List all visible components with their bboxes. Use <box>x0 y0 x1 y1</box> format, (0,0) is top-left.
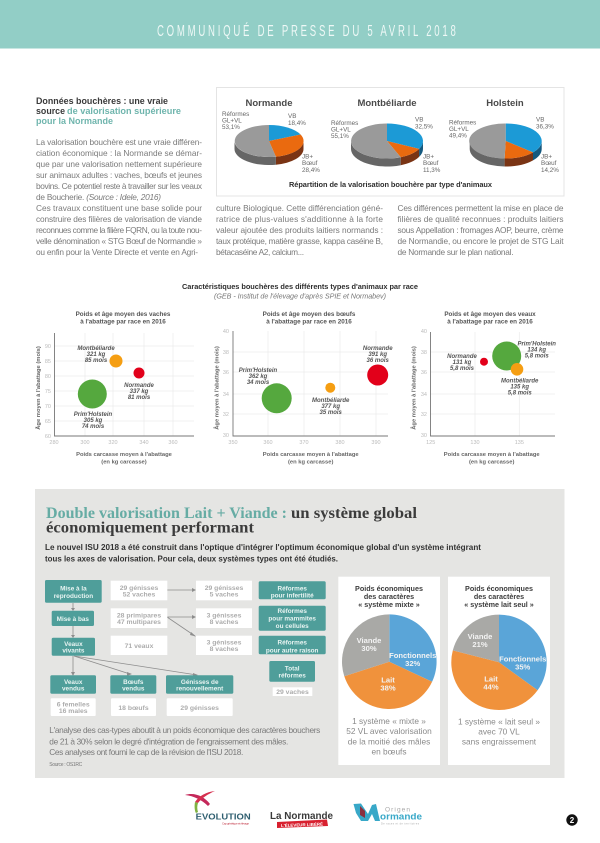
pie panel: système lait seul: 44% <box>483 682 499 692</box>
pie panel: système lait seul: des caractères <box>474 592 524 601</box>
pie panel: système mixte: Viande <box>357 636 381 645</box>
pie: Holstein: JB+ <box>541 154 552 160</box>
value box: 29 vaches: 29 vaches <box>276 689 309 696</box>
pie: Holstein <box>449 98 559 174</box>
chart: bœufs: 362 kg <box>249 374 268 380</box>
chart: vaches: 320 <box>108 440 118 446</box>
chart: veaux: 134 kg <box>527 348 546 354</box>
flow box: réformes pour infertilité: pour infertilité <box>271 592 314 600</box>
flow box: réformes pour mammites: ou cellules <box>276 623 309 630</box>
text block: column 3: de Normandie, ou encore le projet de STG Lait <box>398 236 564 246</box>
flow box: réformes pour mammites <box>259 606 326 631</box>
text block: column 3: Ces différences permettent la mise en place de <box>398 203 564 213</box>
logo: La Normande <box>270 810 333 828</box>
chart: vaches: 65 <box>45 419 51 425</box>
heading: caractéristiques bouchères: (GEB - Institut de l'élevage d'après SPIE et Normabev) <box>214 292 386 300</box>
pie panel: système lait seul: sans engraissement <box>462 736 537 746</box>
chart: bœufs: 380 <box>335 440 345 446</box>
value box: 71 veaux: 71 veaux <box>125 643 154 650</box>
chart: bœufs: 34 <box>223 392 229 398</box>
heading: données bouchères: Données bouchères : une vraie <box>36 96 168 106</box>
chart: bœufs: 30 <box>223 433 229 439</box>
flow box: mise à la reproduction: Mise à la <box>60 586 87 592</box>
text block: column 1 <box>36 137 203 257</box>
chart: bœufs: Poids carcasse moyen à l'abattage <box>263 452 359 458</box>
chart: veaux: 125 <box>426 440 435 446</box>
chart: bœufs: 360 <box>263 440 273 446</box>
pie: Holstein: VB <box>536 116 544 124</box>
flow box: veaux vivants <box>52 638 95 656</box>
pie panel: système mixte: Fonctionnels <box>389 651 436 660</box>
pie panel: système lait seul: avec 70 VL <box>478 726 520 736</box>
heading: données bouchères: source <box>36 106 65 116</box>
value box: 3 génisses 8 vaches: 8 vaches <box>210 619 239 626</box>
chart: bœufs: Poids et âge moyen des bœufs <box>263 311 356 318</box>
chart: vaches <box>35 311 194 466</box>
panel heading: Double valorisation Lait + Viande : <box>46 505 287 522</box>
pie: Normande: Normande <box>246 98 292 109</box>
chart: vaches: 70 <box>45 404 51 410</box>
chart: vaches: 85 <box>45 359 51 365</box>
chart: veaux: 135 <box>515 440 524 446</box>
flow box: veaux vendus: Veaux <box>64 679 83 686</box>
pie: Holstein: 49,4% <box>449 132 467 140</box>
flow box: veaux vivants: Veaux <box>64 641 83 648</box>
panel: répartition de la valorisation bouchère <box>216 88 564 196</box>
panel heading: un système global <box>291 505 418 522</box>
flow box: veaux vendus: vendus <box>62 686 85 692</box>
chart: veaux: 130 <box>470 440 480 446</box>
flow box: total réformes <box>269 661 315 682</box>
pie panel: système lait seul: 1 système « lait seul » <box>458 716 540 726</box>
page number: 2 <box>570 816 575 825</box>
pie: Holstein: 14,2% <box>541 167 559 174</box>
chart: vaches: 81 mois <box>128 395 151 401</box>
value box: 29 génisses 52 vaches <box>111 581 167 600</box>
value box: 6 femelles 16 males: 6 femelles <box>57 702 90 708</box>
pie: Holstein: GL+VL <box>449 126 469 133</box>
flow box: veaux vivants: vivants <box>62 648 85 654</box>
text block: column 1: bovins. Ce potentiel reste à travailler sur les veaux <box>36 181 203 191</box>
chart: bœufs: 377 kg <box>321 404 340 410</box>
chart: bœufs: 36 mois <box>367 358 390 364</box>
flow box: total réformes: réformes <box>279 672 306 680</box>
flow box: réformes pour infertilité: Réformes <box>277 586 307 592</box>
chart: bœufs: 38 <box>223 350 229 356</box>
text block: column 1: de Boucherie. (Source : Idele, 2016) <box>36 192 161 202</box>
chart: veaux: 40 <box>421 329 427 335</box>
pie: Montbéliarde: GL+VL <box>331 126 351 134</box>
pie panel: système lait seul: Viande <box>468 632 492 641</box>
value box: 6 femelles 16 males <box>51 698 96 716</box>
chart: veaux: 131 kg <box>453 360 472 366</box>
pie: Montbéliarde <box>331 98 441 174</box>
pie: Holstein: Bœuf <box>541 160 557 167</box>
flow arrows <box>71 588 198 677</box>
pie panel: système lait seul <box>448 577 550 765</box>
text block: column 1: reconnues comme la filière FQRN, ou la toute nou- <box>36 225 202 235</box>
page number <box>566 814 578 826</box>
text block: column 3: de Normande sur le plan national. <box>398 247 514 257</box>
chart: veaux: 5,8 mois <box>450 366 475 372</box>
pie panel caption: Répartition de la valorisation bouchère par type d'animaux <box>289 180 493 189</box>
panel heading: économiquement performant <box>46 520 255 536</box>
pie: Holstein: Holstein <box>486 98 524 109</box>
pie: Normande: 53,1% <box>222 124 240 131</box>
text block: column 2: valeur ajoutée des produits laitiers normands : <box>216 225 383 235</box>
chart: veaux: Prim'Holstein <box>517 342 556 348</box>
flow box: mise à bas <box>52 611 94 626</box>
chart: bœufs: 370 <box>299 440 309 446</box>
value box: 3 génisses 8 vaches, autre raison: 3 génisses <box>207 640 242 646</box>
header banner <box>0 0 600 48</box>
value box: 3 génisses 8 vaches: 3 génisses <box>207 612 242 620</box>
text block: column 1: ciation économique : la Normande se démar- <box>36 148 202 158</box>
chart: bœufs <box>214 311 393 466</box>
text block: column 1: construire des filières de valorisation de viande <box>36 214 202 224</box>
panel: double valorisation <box>35 489 564 778</box>
value box: 3 génisses 8 vaches, autre raison <box>196 636 252 655</box>
logo: Origen Normande: De races et de territoires <box>381 822 420 826</box>
text block: column 3: sous Appellation : fromages AOP, beurre, crème <box>398 225 564 235</box>
chart: vaches: (en kg carcasse) <box>101 460 147 466</box>
panel conclusion text <box>49 725 320 768</box>
text block: column 2 <box>216 203 383 257</box>
value box: 6 femelles 16 males: 16 males <box>59 708 88 715</box>
flow box: bœufs vendus: Bœufs <box>123 679 144 686</box>
logo: Origen Normande <box>354 804 422 826</box>
heading: caractéristiques bouchères: Caractéristiques bouchères des différents types d'animaux par race <box>182 282 418 291</box>
flow box: génisses de renouvellement: renouvellement <box>176 686 224 692</box>
flow box: réformes pour mammites: Réformes <box>277 608 307 615</box>
chart: veaux: Montbéliarde <box>501 378 539 384</box>
text block: column 1: Ces travaux constituent une base solide pour <box>36 203 202 213</box>
pie panel: système mixte: 1 système « mixte » <box>352 716 426 726</box>
flow box: réformes pour autre raison <box>259 636 326 654</box>
chart: vaches: 280 <box>49 440 59 446</box>
panel conclusion text: de 21 à 30% selon le degré d'intégration de l'engraissement des mâles. <box>49 736 288 746</box>
chart: vaches: Normande <box>124 383 154 389</box>
chart: vaches: 337 kg <box>130 389 149 395</box>
pie: Montbéliarde: 55,1% <box>331 133 349 140</box>
chart: bœufs: 34 mois <box>247 380 270 386</box>
pie: Normande: Réformes <box>222 111 249 118</box>
chart: vaches: Poids et âge moyen des vaches <box>76 311 171 318</box>
chart: vaches: 340 <box>139 440 149 446</box>
chart: bœufs: 35 mois <box>320 410 343 416</box>
heading: données bouchères: pour la Normande <box>36 116 113 126</box>
value box: 28 primipares 47 multipares: 47 multipares <box>117 619 161 626</box>
chart: veaux: Poids carcasse moyen à l'abattage <box>444 452 540 458</box>
chart: bœufs: Âge moyen à l'abattage (mois) <box>214 346 220 430</box>
flow box: réformes pour autre raison: pour autre raison <box>266 648 319 654</box>
flow box: réformes pour infertilité <box>259 581 326 600</box>
flow box: réformes pour autre raison: Réformes <box>277 640 307 646</box>
panel intro text: Le nouvel ISU 2018 a été construit dans l'optique d'intégrer l'optimum économique global d'un système intégrant <box>45 543 481 552</box>
pie panel: système lait seul: Lait <box>484 674 498 684</box>
flow box: veaux vendus <box>50 675 96 694</box>
panel heading <box>46 505 418 536</box>
chart: veaux: 135 kg <box>510 384 529 390</box>
text block: column 1: que par une valorisation nettement supérieure <box>36 159 202 169</box>
pie: Montbéliarde: Réformes <box>331 120 358 127</box>
chart: veaux: Âge moyen à l'abattage (mois) <box>410 346 418 430</box>
text block: column 3: filières de qualité reconnues : produits laitiers <box>398 214 564 224</box>
text block: column 2: taux protéique, matière grasse, kappa caséine B, <box>216 236 383 246</box>
pie panel: système lait seul: 21% <box>472 640 488 649</box>
pie panel: système mixte: des caractères <box>364 592 414 601</box>
pie panel: système lait seul: Poids économiques <box>465 584 533 593</box>
value box: 29 génisses 5 vaches <box>196 581 252 600</box>
value box: 3 génisses 8 vaches <box>196 608 252 628</box>
heading: caractéristiques bouchères <box>182 282 418 300</box>
logo: Evolution: Cap génétique et élevage <box>222 822 249 826</box>
text block: column 1: velle dénomination « STG Bœuf de Normandie » <box>36 236 202 246</box>
chart: vaches: 90 <box>45 344 51 350</box>
heading: données bouchères: de valorisation supérieure <box>67 106 181 116</box>
chart: bœufs: Montbéliarde <box>312 398 350 404</box>
pie: Holstein: Réformes <box>449 120 476 126</box>
chart: vaches: 305 kg <box>84 418 103 424</box>
logo: La Normande: L'ÉLEVEUR LIBÉRÉ <box>281 822 323 828</box>
pie: Normande: 18,4% <box>288 120 306 127</box>
heading: données bouchères <box>36 96 181 126</box>
flow box: réformes pour mammites: pour mammites <box>268 616 316 622</box>
text block: column 1: La valorisation bouchère est une vraie différen- <box>36 137 202 147</box>
value box: 29 génisses 5 vaches: 29 génisses <box>205 585 243 592</box>
logo: Origen Normande: ormande <box>380 812 422 822</box>
flow box: mise à la reproduction: reproduction <box>54 593 93 600</box>
logo: Origen Normande: Origen <box>385 807 410 814</box>
value box: 3 génisses 8 vaches, autre raison: 8 vaches <box>210 646 239 653</box>
text block: column 2: ratrice de plus-values s'additionne à la forte <box>216 214 383 224</box>
chart: veaux: 36 <box>421 370 427 376</box>
pie: Holstein: 36,3% <box>536 124 554 130</box>
value box: 29 génisses 52 vaches: 29 génisses <box>120 585 158 592</box>
flow box: génisses de renouvellement: Génisses de <box>181 679 219 686</box>
pie: Montbéliarde: 32,5% <box>415 124 433 130</box>
chart: veaux: 38 <box>421 350 427 356</box>
pie: Normande: GL+VL <box>222 118 242 124</box>
pie panel: système mixte: 52 VL avec valorisation <box>346 726 432 736</box>
chart: bœufs: 32 <box>223 412 229 418</box>
panel intro text <box>45 543 481 564</box>
pie panel: système mixte: 32% <box>405 659 421 668</box>
chart: veaux: (en kg carcasse) <box>469 460 514 466</box>
logo: Evolution <box>185 791 251 826</box>
value box: 18 bœufs <box>111 698 156 716</box>
flow box: bœufs vendus <box>110 675 156 694</box>
chart: vaches: à l'abattage par race en 2016 <box>80 318 166 326</box>
chart: vaches: 60 <box>45 434 51 440</box>
chart: bœufs: à l'abattage par race en 2016 <box>266 318 352 326</box>
text block: column 2: culture Biologique. Cette différenciation géné- <box>216 203 383 213</box>
value box: 28 primipares 47 multipares: 28 primipares <box>117 612 161 620</box>
chart: veaux: à l'abattage par race en 2016 <box>447 318 533 326</box>
flow box: génisses de renouvellement <box>166 675 233 694</box>
pie panel: système mixte: 30% <box>361 644 377 653</box>
flow box: total réformes: Total <box>285 666 300 672</box>
chart: vaches: Poids carcasse moyen à l'abattage <box>76 452 173 458</box>
pie: Montbéliarde: JB+ <box>423 154 434 160</box>
pie panel: système mixte: en bœufs <box>371 746 407 756</box>
chart: veaux: 34 <box>421 392 427 398</box>
panel conclusion text: L'analyse des cas-types aboutit à un poids économique des caractères bouchers <box>49 725 320 735</box>
text block: column 2: bétacaséine A2, calcium... <box>216 247 304 257</box>
flow box: mise à la reproduction <box>45 580 102 603</box>
chart: bœufs: Prim'Holstein <box>239 368 278 374</box>
flow box: mise à bas: Mise à bas <box>57 616 89 623</box>
chart: vaches: 321 kg <box>87 352 106 358</box>
pie: Normande: VB <box>288 113 296 120</box>
chart: vaches: Prim'Holstein <box>74 412 113 418</box>
chart: vaches: 300 <box>80 440 90 446</box>
pie: Normande <box>222 98 320 174</box>
pie: Montbéliarde: Montbéliarde <box>357 98 417 109</box>
pie panel: système mixte: Lait <box>381 676 395 684</box>
flow diagram <box>45 580 326 716</box>
chart: veaux: 32 <box>421 412 427 418</box>
pie panel: système mixte: « système mixte » <box>358 600 420 609</box>
panel conclusion text: Ces analyses ont fourni le cap de la révision de l'ISU 2018. <box>49 747 243 757</box>
text block: column 3 <box>398 203 564 257</box>
panel conclusion text: Source : OS1RC <box>49 762 83 768</box>
logo: La Normande: La Normande <box>270 810 333 822</box>
value box: 28 primipares 47 multipares <box>111 608 167 628</box>
pie: Montbéliarde: Bœuf <box>423 160 439 167</box>
chart: veaux: 5,8 mois <box>525 354 549 360</box>
chart: vaches: Montbéliarde <box>77 346 115 352</box>
pie: Normande: Bœuf <box>302 160 318 167</box>
chart: bœufs: 350 <box>228 440 238 446</box>
chart: bœufs: 390 <box>371 440 381 446</box>
pie: Montbéliarde: VB <box>415 116 423 124</box>
value box: 18 bœufs: 18 bœufs <box>118 705 149 712</box>
chart: veaux: Normande <box>447 354 477 360</box>
chart: vaches: 80 <box>45 374 51 380</box>
chart: veaux: Poids et âge moyen des veaux <box>444 311 536 318</box>
pie panel: système mixte: 38% <box>380 684 396 692</box>
chart: vaches: 360 <box>168 440 178 446</box>
value box: 29 génisses 5 vaches: 5 vaches <box>210 592 239 598</box>
value box: 29 vaches <box>273 687 312 696</box>
value box: 29 génisses <box>167 698 233 716</box>
chart: bœufs: 391 kg <box>368 352 387 358</box>
text block: column 1: sur animaux adultes : vaches, bœufs et jeunes <box>36 170 202 180</box>
pie: Normande: JB+ <box>302 154 313 160</box>
header banner: COMMUNIQUÉ DE PRESSE DU 5 AVRIL 2018 <box>157 21 456 40</box>
value box: 29 génisses: 29 génisses <box>180 705 219 712</box>
pie: Montbéliarde: 11,3% <box>423 167 441 174</box>
chart: vaches: 85 mois <box>85 358 108 364</box>
chart: vaches: 75 <box>45 389 51 395</box>
chart: veaux <box>410 311 556 466</box>
flow box: bœufs vendus: vendus <box>122 686 145 692</box>
text block: column 1: ou enfin pour la Vente Directe et vente en Agri- <box>36 247 198 257</box>
panel intro text: tous les axes de valorisation. Pour cela, deux systèmes types ont été étudiés. <box>45 555 338 564</box>
pie panel: système lait seul: « système lait seul » <box>464 600 534 609</box>
chart: veaux: 30 <box>421 433 427 439</box>
pie panel: système lait seul: Fonctionnels <box>499 654 546 664</box>
chart: bœufs: (en kg carcasse) <box>288 460 333 466</box>
logo: Evolution: EVOLUTION <box>196 812 251 822</box>
pie panel: système lait seul: 35% <box>515 662 531 672</box>
chart: bœufs: 36 <box>223 370 229 376</box>
chart: vaches: 74 mois <box>82 424 105 430</box>
chart: vaches: Âge moyen à l'abattage (mois) <box>35 346 42 430</box>
pie panel: système mixte <box>338 577 440 765</box>
pie: Normande: 28,4% <box>302 167 320 174</box>
chart: bœufs: 40 <box>223 329 229 335</box>
pie panel: système mixte: Poids économiques <box>355 584 423 593</box>
pie panel: système mixte: de la moitié des mâles <box>348 736 430 746</box>
value box: 29 génisses 52 vaches: 52 vaches <box>123 592 155 598</box>
value box: 71 veaux <box>111 636 167 655</box>
chart: veaux: 5,8 mois <box>508 390 532 396</box>
chart: bœufs: Normande <box>363 346 393 352</box>
